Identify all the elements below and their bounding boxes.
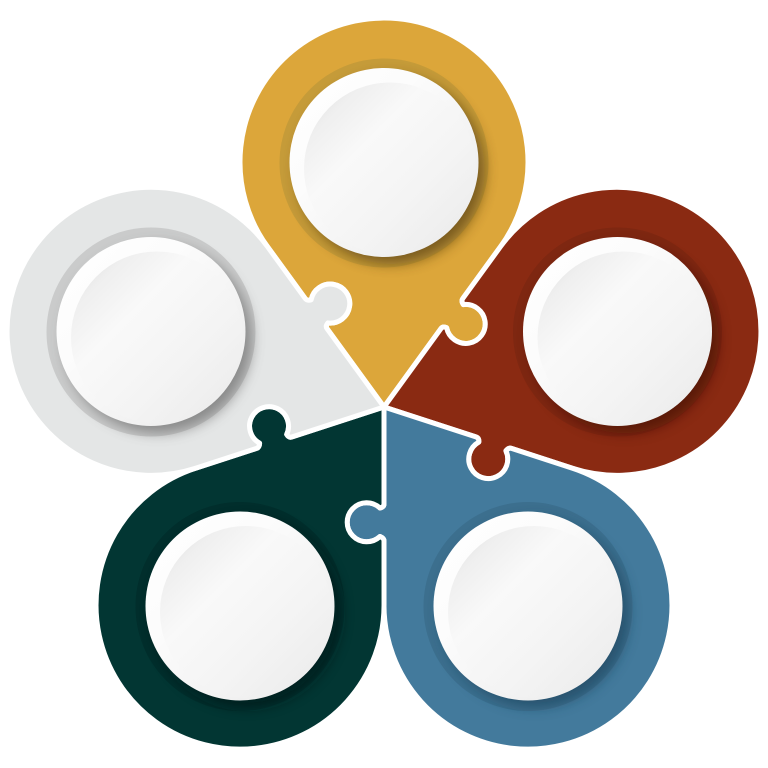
white disc: grey <box>56 237 246 426</box>
ring and shadow: grey <box>46 228 256 436</box>
panel: green pin <box>39 322 500 768</box>
ring and shadow: red <box>513 228 722 436</box>
panel: grey pin <box>0 150 428 544</box>
ring and shadow: green <box>136 502 344 711</box>
ring and shadow: blue <box>424 502 632 711</box>
white disc: yellow <box>290 68 478 257</box>
white disc: blue <box>434 512 622 700</box>
panel: red pin <box>340 150 768 544</box>
white disc: green <box>146 512 334 700</box>
white disc: red <box>523 237 712 426</box>
ring and shadow: yellow <box>280 58 488 268</box>
panel: blue pin <box>268 322 729 768</box>
panel: yellow pin <box>240 18 528 407</box>
